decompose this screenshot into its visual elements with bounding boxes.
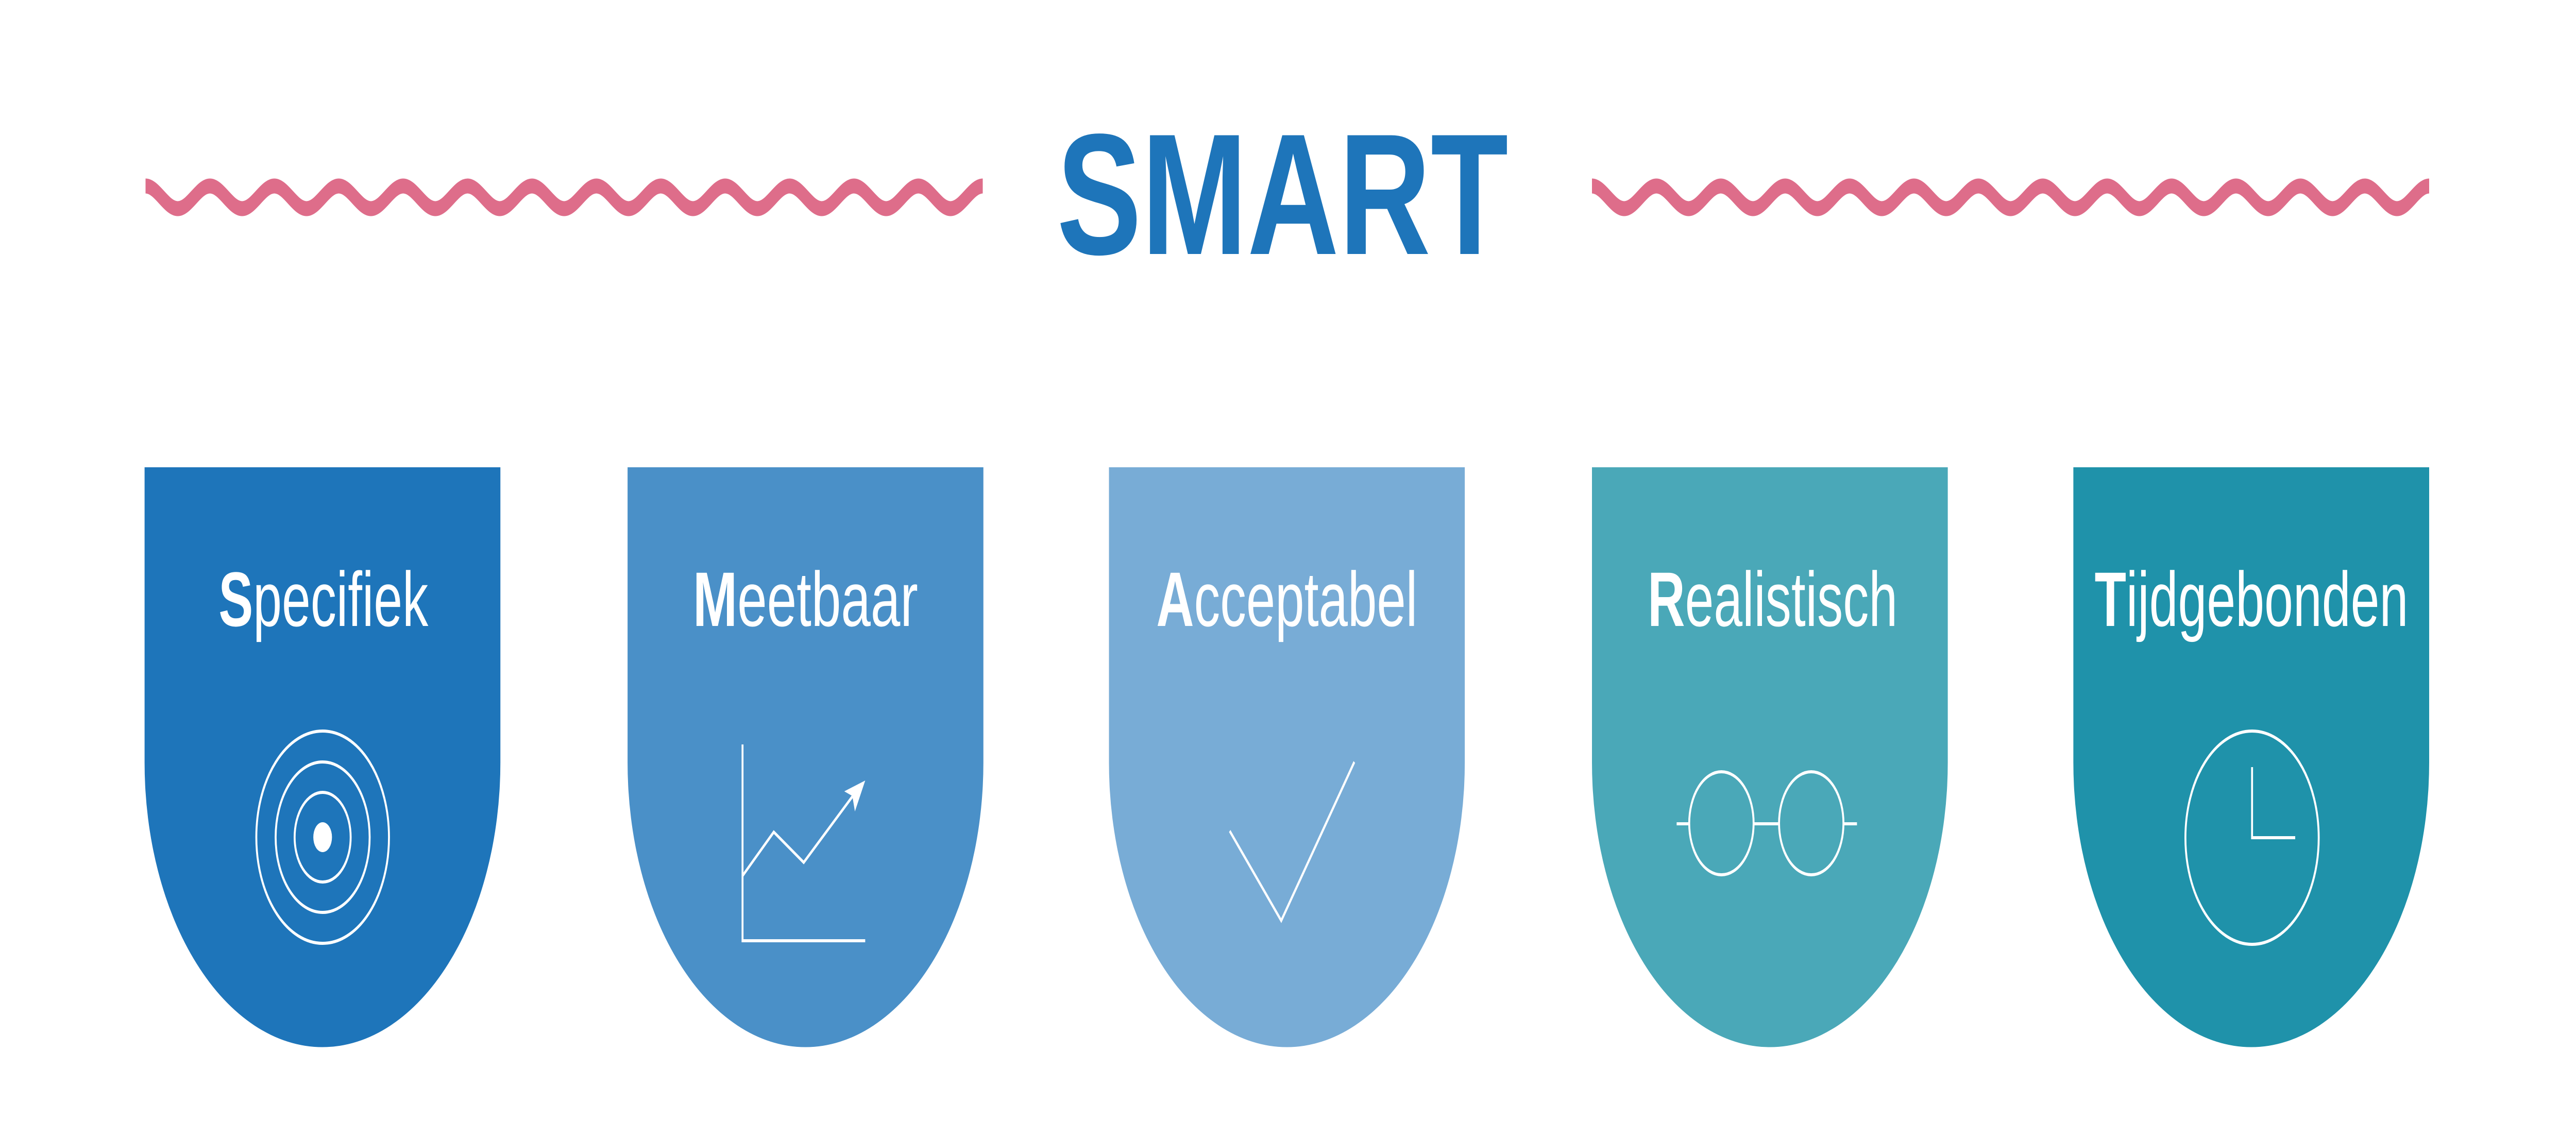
heading: Meetbaar: Meetbaar — [693, 556, 918, 642]
wave left — [145, 186, 983, 209]
panel: Acceptabel — [1109, 467, 1465, 1047]
icon: checkmark — [1230, 762, 1354, 921]
icon: glasses — [1676, 772, 1857, 875]
heading: Acceptabel: Acceptabel — [1156, 556, 1417, 642]
panel: Meetbaar — [628, 467, 984, 1047]
heading: Specifiek: Specifiek — [218, 556, 429, 642]
wave right — [1592, 186, 2429, 209]
panel: Specifiek — [145, 467, 500, 1047]
panel: Realistisch — [1592, 467, 1948, 1047]
icon: growth chart — [742, 744, 865, 941]
heading: Tijdgebonden: Tijdgebonden — [2095, 556, 2408, 642]
title: SMART — [1057, 98, 1509, 291]
heading: Realistisch: Realistisch — [1648, 556, 1897, 642]
icon: target — [257, 731, 389, 943]
icon: clock — [2185, 731, 2319, 944]
panel: Tijdgebonden — [2073, 467, 2429, 1047]
